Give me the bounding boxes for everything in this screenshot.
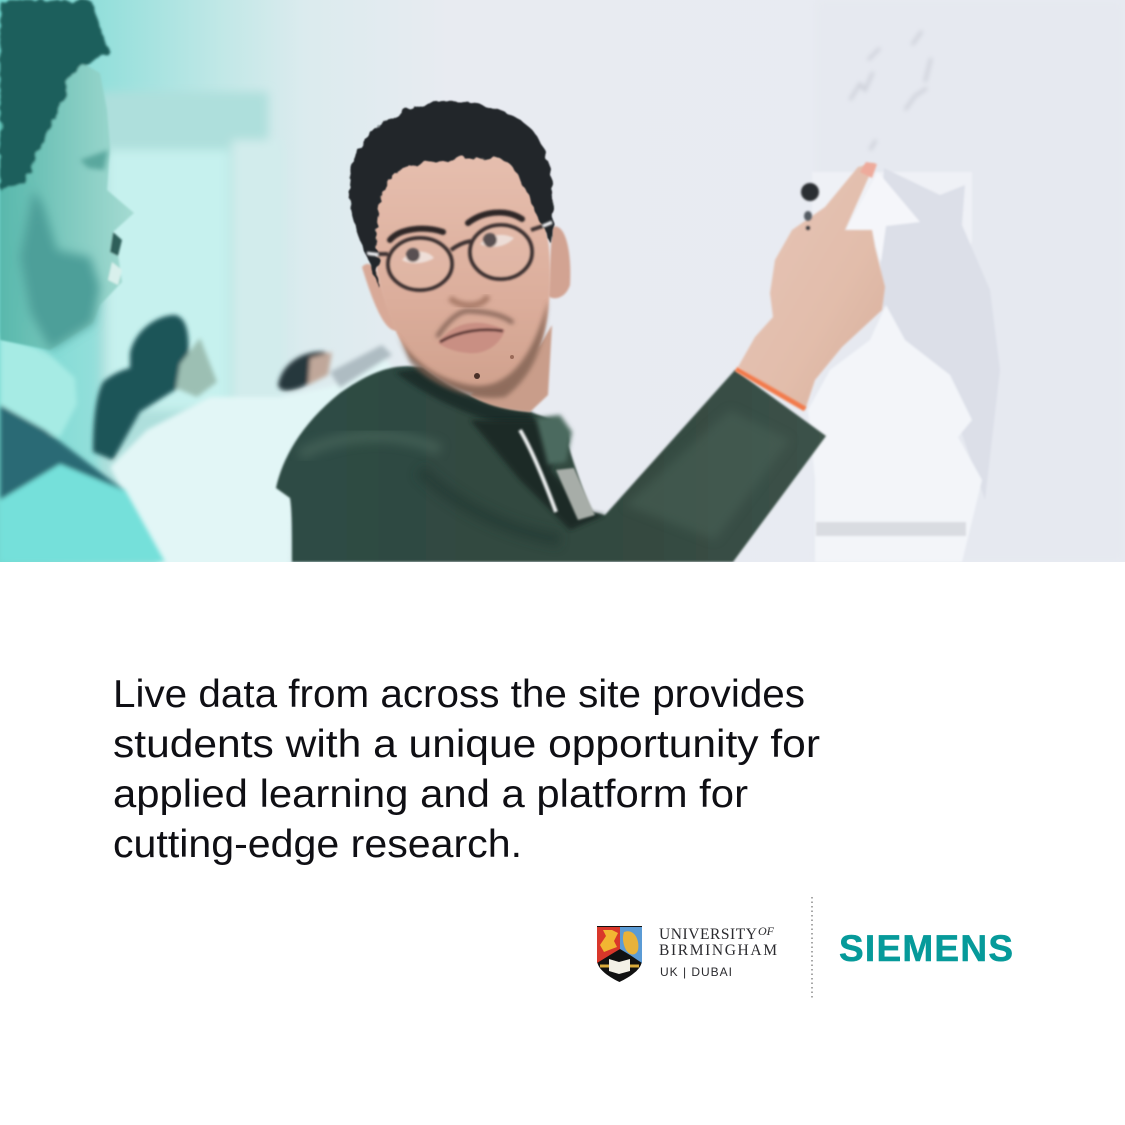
hair	[0, 0, 110, 190]
university wordmark: BIRMINGHAM	[659, 942, 777, 959]
eye	[80, 150, 108, 170]
photo: student pointing at a whiteboard with teal gradient	[0, 0, 1125, 562]
main text block: applied learning and a platform for	[113, 773, 748, 816]
lower shirt	[0, 420, 165, 562]
logos row	[597, 897, 1013, 998]
university wordmark: UNIVERSITY	[659, 926, 757, 943]
vest	[0, 405, 125, 500]
main text block: students with a unique opportunity for	[113, 723, 820, 766]
glasses	[367, 222, 552, 290]
dotted divider	[811, 897, 813, 1000]
far student	[278, 352, 328, 391]
hoodie	[276, 366, 826, 562]
raised hand	[738, 163, 885, 410]
wall background	[0, 0, 1125, 562]
left student	[0, 0, 165, 562]
icon: university crest	[597, 926, 642, 982]
neck	[470, 325, 552, 412]
stubble	[395, 300, 548, 398]
main text block: Live data from across the site provides	[113, 673, 805, 716]
main text block: cutting-edge research.	[113, 823, 522, 866]
lower lip	[108, 262, 122, 285]
university wordmark: UK | DUBAI	[660, 965, 732, 979]
Siemens logo: SIEMENS	[839, 928, 1013, 969]
background students	[93, 315, 393, 566]
white shirt	[110, 357, 393, 566]
fingertip	[860, 162, 877, 178]
orange wristband	[736, 369, 805, 409]
face	[0, 50, 134, 350]
eyebrows	[390, 212, 522, 240]
eyes	[402, 233, 514, 263]
face	[374, 149, 550, 396]
nose	[450, 296, 488, 305]
collar	[0, 335, 77, 437]
ears	[362, 264, 398, 330]
main text block	[113, 673, 820, 866]
moustache	[437, 311, 513, 337]
university wordmark	[659, 924, 777, 979]
whiteboard paper and hand shadow	[808, 168, 1000, 562]
university wordmark: OF	[758, 924, 775, 938]
moustache	[110, 232, 122, 256]
whiteboard writing	[850, 31, 931, 150]
University of Birmingham logo	[597, 924, 777, 982]
main student	[276, 102, 885, 562]
hair	[348, 102, 553, 287]
beard	[20, 190, 100, 350]
background window frame	[100, 0, 1125, 562]
marker pen	[801, 183, 819, 230]
moles	[474, 373, 480, 379]
face	[176, 338, 217, 397]
hair	[93, 315, 189, 460]
mouth	[438, 323, 505, 353]
